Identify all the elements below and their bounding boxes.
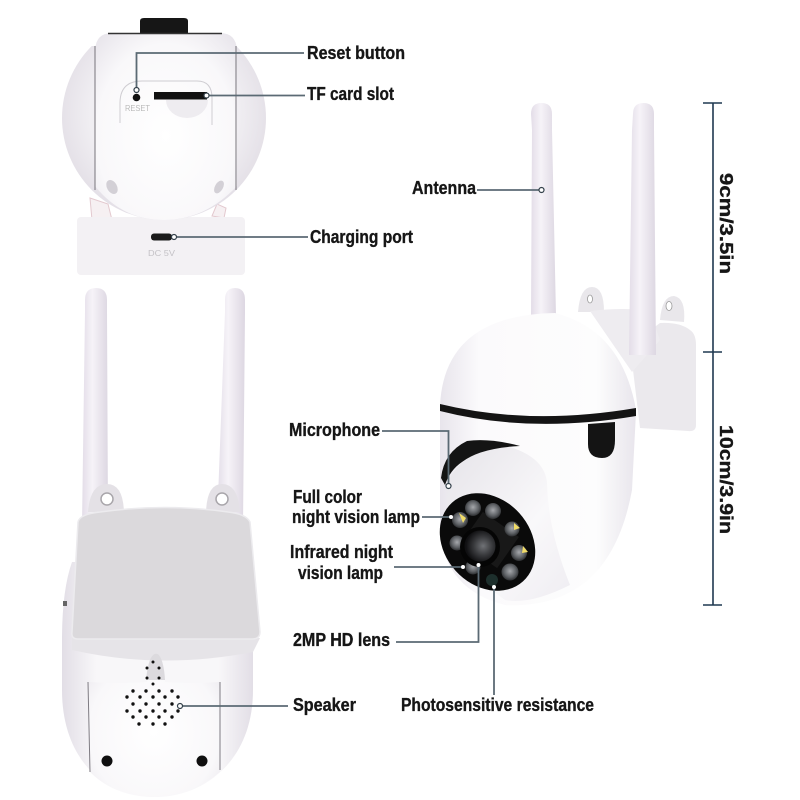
wall mount box [630,323,696,431]
body [62,562,253,797]
callout: 2MP HD lens [293,563,480,650]
dimension: upper: 9cm/3.5in [716,173,737,274]
speaker slot [146,654,165,680]
black band [440,404,636,424]
callout: microphone [289,420,451,488]
tf slot [154,92,207,100]
speaker grille [125,660,180,726]
shadow below plate [72,638,260,661]
photoresistor [486,574,498,586]
antennas [531,103,556,316]
callout: antenna [412,178,544,198]
camera: top/back view [62,16,266,275]
lens ring [420,474,555,610]
callout: antenna: Antenna [412,178,477,198]
inner housing [461,512,519,568]
callout: infrared night vision lamp: vision lamp [298,563,383,583]
callout: full color night vision lamp: night vision lamp [292,507,420,527]
black tab [588,422,615,458]
arm [590,309,660,372]
callout: reset button [134,43,405,92]
callout: charging port [172,227,413,247]
led yellow highlights [459,513,528,553]
camera: front view [420,103,696,610]
mount feet [90,198,112,220]
callout: photosensitive resistance: Photosensitive resistance [401,695,594,715]
callout: speaker [178,695,356,715]
callout: microphone: Microphone [289,420,380,440]
callout: speaker: Speaker [293,695,356,715]
dome [440,313,636,418]
dimension: lower: 10cm/3.9in [716,425,737,534]
reset hole [133,94,140,101]
ball [446,447,570,601]
mounting plate [72,508,260,639]
dimension scale [703,103,737,605]
wall mount tabs [578,287,604,312]
lens [460,527,500,567]
antenna rear [629,103,656,355]
screw holes [104,178,120,196]
base block [77,217,245,275]
wall tabs [88,484,124,512]
camera: top/back view: DC 5V [148,249,176,258]
callout: infrared night vision lamp [290,542,465,583]
sphere [62,46,266,218]
camera: rear view [62,288,260,797]
rotating panel [88,654,220,797]
leds [450,500,527,580]
lower body [440,410,636,605]
lens knob [140,18,188,33]
small marks: RESET [125,104,150,113]
front plate [95,33,237,220]
callout: reset button: Reset button [307,43,405,63]
callout: TF card slot: TF card slot [307,84,394,104]
callout: photosensitive resistance [401,585,594,715]
callout: infrared night vision lamp: Infrared night [290,542,393,562]
charging port [151,234,172,240]
card slot cover [120,81,212,125]
callout: full color night vision lamp [292,487,453,527]
callout: TF card slot [204,84,394,104]
callout: 2MP HD lens: 2MP HD lens [293,630,390,650]
screw holes [102,756,112,766]
callout: charging port: Charging port [310,227,413,247]
callout: full color night vision lamp: Full color [293,487,362,507]
ball crescent [441,440,520,485]
antennas [82,288,108,525]
